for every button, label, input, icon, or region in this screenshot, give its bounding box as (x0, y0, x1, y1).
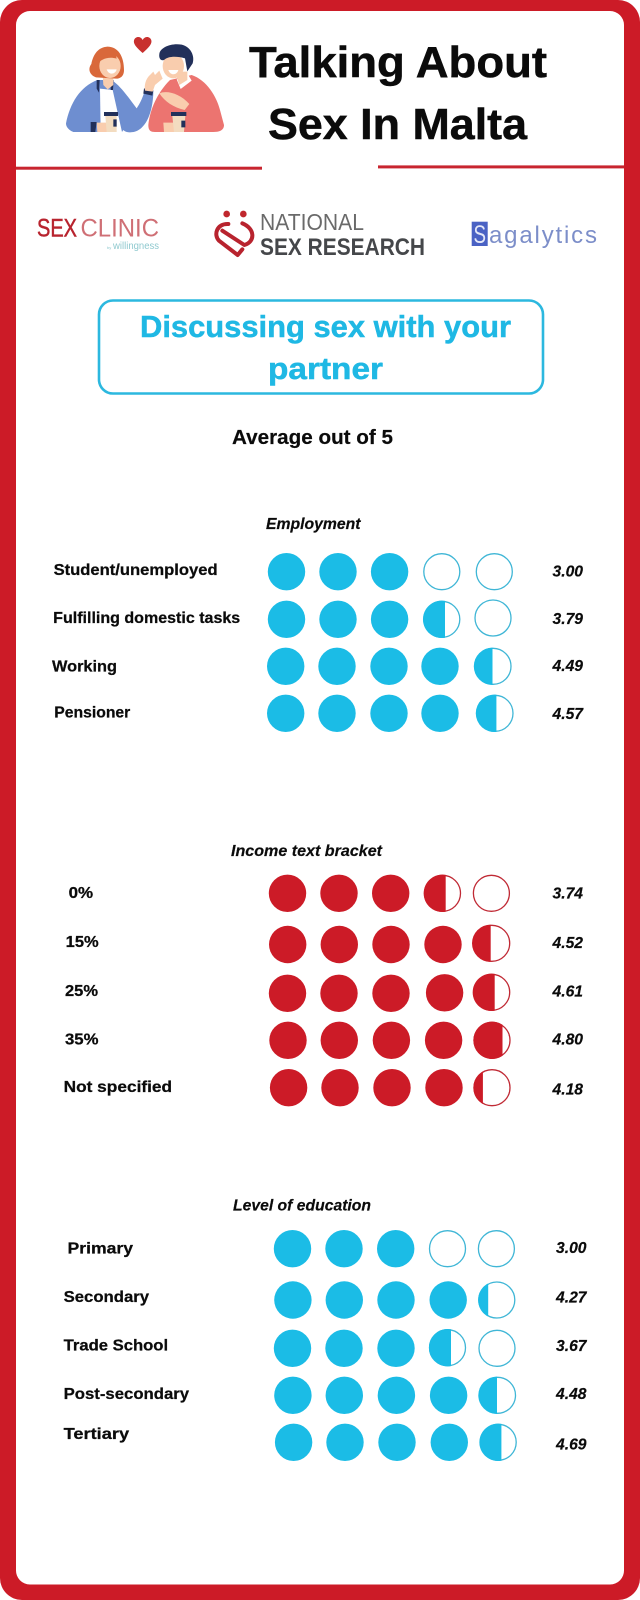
row: 15% 4.52: 15% (66, 934, 99, 951)
panel: income tax bracket (64, 843, 583, 1106)
row: pensioner 4.57: 4.57 (552, 706, 584, 723)
row: working 4.49 (52, 648, 583, 685)
row: 0% 3.74 (69, 875, 583, 912)
row: 35% 4.80 (65, 1022, 583, 1059)
row: 0% 3.74: 0% (69, 885, 93, 902)
row: tertiary 4.69: 4.69 (555, 1436, 587, 1453)
logo: Sex Clinic (37, 214, 159, 252)
icon: heart (134, 37, 151, 53)
row: 35% 4.80: 4.80 (552, 1031, 583, 1048)
row: pensioner 4.57: Pensioner (54, 705, 130, 722)
logo: National Sex Research (216, 209, 425, 261)
logo: Sex Clinic: CLINIC (80, 214, 159, 242)
row: fulfilling domestic tasks 3.79 (53, 600, 583, 638)
row: primary 3.00: 3.00 (556, 1240, 587, 1257)
logo: National Sex Research: NATIONAL (260, 209, 364, 235)
man's collar, face and hair (177, 75, 192, 89)
row: primary 3.00: Primary (68, 1240, 133, 1257)
row: not specified 4.18: Not specified (64, 1079, 172, 1096)
row: secondary 4.27: Secondary (64, 1289, 149, 1306)
title: Talking About (249, 38, 547, 87)
row: 15% 4.52 (66, 925, 583, 963)
panel: employment (52, 516, 584, 732)
icon: couple talking over coffee (66, 37, 224, 132)
row: not specified 4.18 (64, 1069, 583, 1106)
logo: Sagalytics: agalytics (489, 222, 597, 249)
row: fulfilling domestic tasks 3.79: Fulfilling domestic tasks (53, 610, 240, 627)
row: trade school 3.67: 3.67 (556, 1338, 588, 1355)
title: Sex In Malta (268, 100, 528, 149)
row: working 4.49: Working (52, 658, 117, 676)
row: 25% 4.61: 25% (65, 983, 98, 1000)
row: post-secondary 4.48 (64, 1377, 587, 1414)
row: working 4.49: 4.49 (552, 658, 583, 675)
row: post-secondary 4.48: 4.48 (555, 1386, 587, 1403)
row: 0% 3.74: 3.74 (552, 885, 583, 902)
icon: heart with two figures (216, 211, 252, 255)
heading: income text bracket: Income text bracket (231, 843, 383, 860)
subtitle: Average out of 5 (232, 427, 393, 449)
row: tertiary 4.69: Tertiary (64, 1426, 130, 1443)
row: fulfilling domestic tasks 3.79: 3.79 (552, 611, 583, 628)
callout: section heading: Discussing sex with your (140, 309, 511, 344)
row: secondary 4.27: 4.27 (555, 1290, 588, 1306)
row: primary 3.00 (68, 1230, 587, 1267)
logo: Sex Clinic: by (107, 245, 111, 250)
row: student/unemployed 3.00 (54, 553, 583, 590)
logo: Sex Clinic: SEX (37, 214, 77, 242)
hands and coffee cups (97, 92, 189, 132)
row: not specified 4.18: 4.18 (552, 1081, 583, 1098)
woman's jacket (66, 80, 153, 132)
row: post-secondary 4.48: Post-secondary (64, 1386, 189, 1403)
panel: level of education (64, 1198, 588, 1461)
row: 25% 4.61: 4.61 (552, 984, 583, 1000)
title (249, 38, 547, 149)
row: tertiary 4.69 (64, 1424, 587, 1461)
heading: employment: Employment (266, 516, 361, 533)
row: pensioner 4.57 (54, 695, 584, 732)
callout: section heading: partner (268, 351, 383, 386)
row: 25% 4.61 (65, 974, 583, 1012)
logo: Sagalytics: S (474, 221, 486, 249)
heading: level of education: Level of education (233, 1198, 371, 1214)
row: 35% 4.80: 35% (65, 1032, 99, 1049)
row: student/unemployed 3.00: Student/unemployed (54, 562, 218, 579)
woman's hair and face (89, 47, 124, 79)
row: 15% 4.52: 4.52 (552, 935, 583, 952)
man's sweater (148, 75, 224, 132)
callout: section heading (99, 300, 543, 394)
row: trade school 3.67: Trade School (64, 1337, 168, 1354)
logo: Sex Clinic: willingness (112, 241, 159, 252)
row: student/unemployed 3.00: 3.00 (552, 563, 583, 580)
row: secondary 4.27 (64, 1281, 588, 1319)
logo: National Sex Research: SEX RESEARCH (260, 234, 425, 261)
row: trade school 3.67 (64, 1329, 588, 1367)
